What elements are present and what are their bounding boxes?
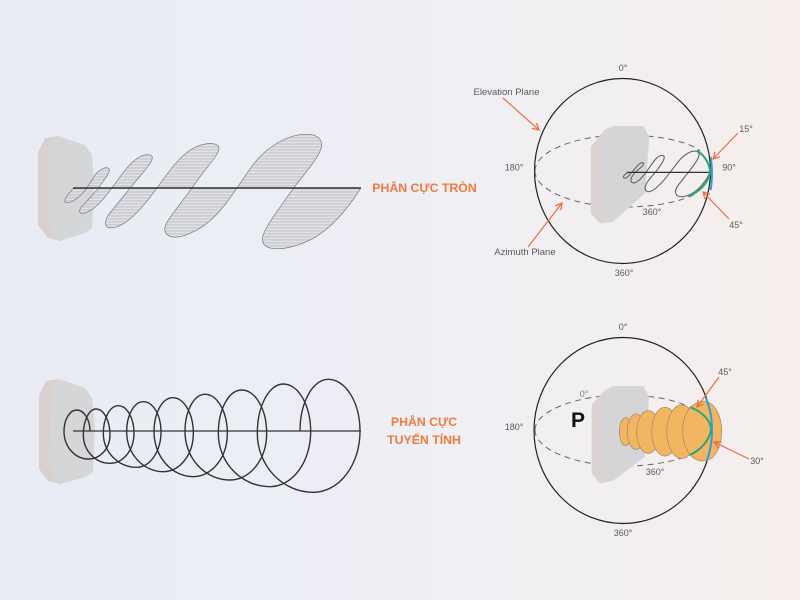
sphere labels: 30° <box>750 456 764 466</box>
sphere labels: Azimuth Plane <box>494 247 556 258</box>
sphere outline <box>534 78 710 264</box>
chart: hatched wave lobes <box>65 134 361 249</box>
sphere labels: 0° <box>619 63 628 73</box>
green elevation arc <box>689 407 711 455</box>
icon: antenna device top left <box>38 136 94 241</box>
sphere labels <box>473 63 753 278</box>
panel: linear polarization sphere <box>505 322 764 538</box>
sphere labels: 360° <box>614 528 633 538</box>
arrows <box>697 377 749 459</box>
sphere labels: 45° <box>718 367 732 377</box>
panel: circular polarization sphere <box>473 63 753 278</box>
sphere labels: 0° <box>580 389 589 399</box>
axis line <box>627 170 710 174</box>
letter P: P <box>571 409 585 432</box>
axis line <box>73 430 361 432</box>
blue azimuth arc <box>711 157 712 190</box>
sphere labels: 15° <box>739 124 753 134</box>
chart: spiral wave <box>64 379 360 492</box>
azimuth plane dashed ellipse <box>535 395 685 466</box>
sphere labels: 360° <box>643 207 662 217</box>
azimuth plane dashed ellipse <box>535 135 700 207</box>
icon: antenna device <box>592 386 649 483</box>
sphere labels: 90° <box>722 162 736 172</box>
icon: antenna device <box>591 126 649 223</box>
sphere labels: 180° <box>505 162 524 172</box>
sphere labels: 180° <box>505 422 524 432</box>
sphere labels: Elevation Plane <box>473 87 540 98</box>
axis line <box>73 187 361 189</box>
sphere labels <box>505 322 764 538</box>
chart: small wave outline <box>623 151 712 197</box>
arrows <box>503 98 738 247</box>
icon: antenna device bottom left <box>39 379 95 484</box>
green elevation arc <box>688 151 710 196</box>
blue azimuth arc <box>706 398 712 461</box>
heading: circular polarization: PHÂN CỰC TRÒN <box>372 180 477 195</box>
sphere labels: 360° <box>615 268 634 278</box>
chart: orange radiation lobes <box>619 398 722 461</box>
sphere labels: 360° <box>646 467 665 477</box>
panel: circular polarization wave <box>38 134 361 249</box>
sphere labels: 45° <box>729 220 743 230</box>
heading: linear polarization: TUYẾN TÍNH <box>387 432 461 447</box>
sphere labels: 0° <box>619 322 628 332</box>
sphere outline <box>534 338 712 524</box>
panel: linear polarization wave <box>39 379 361 492</box>
heading: linear polarization: PHÂN CỰC <box>391 414 457 429</box>
heading: linear polarization <box>387 414 461 447</box>
